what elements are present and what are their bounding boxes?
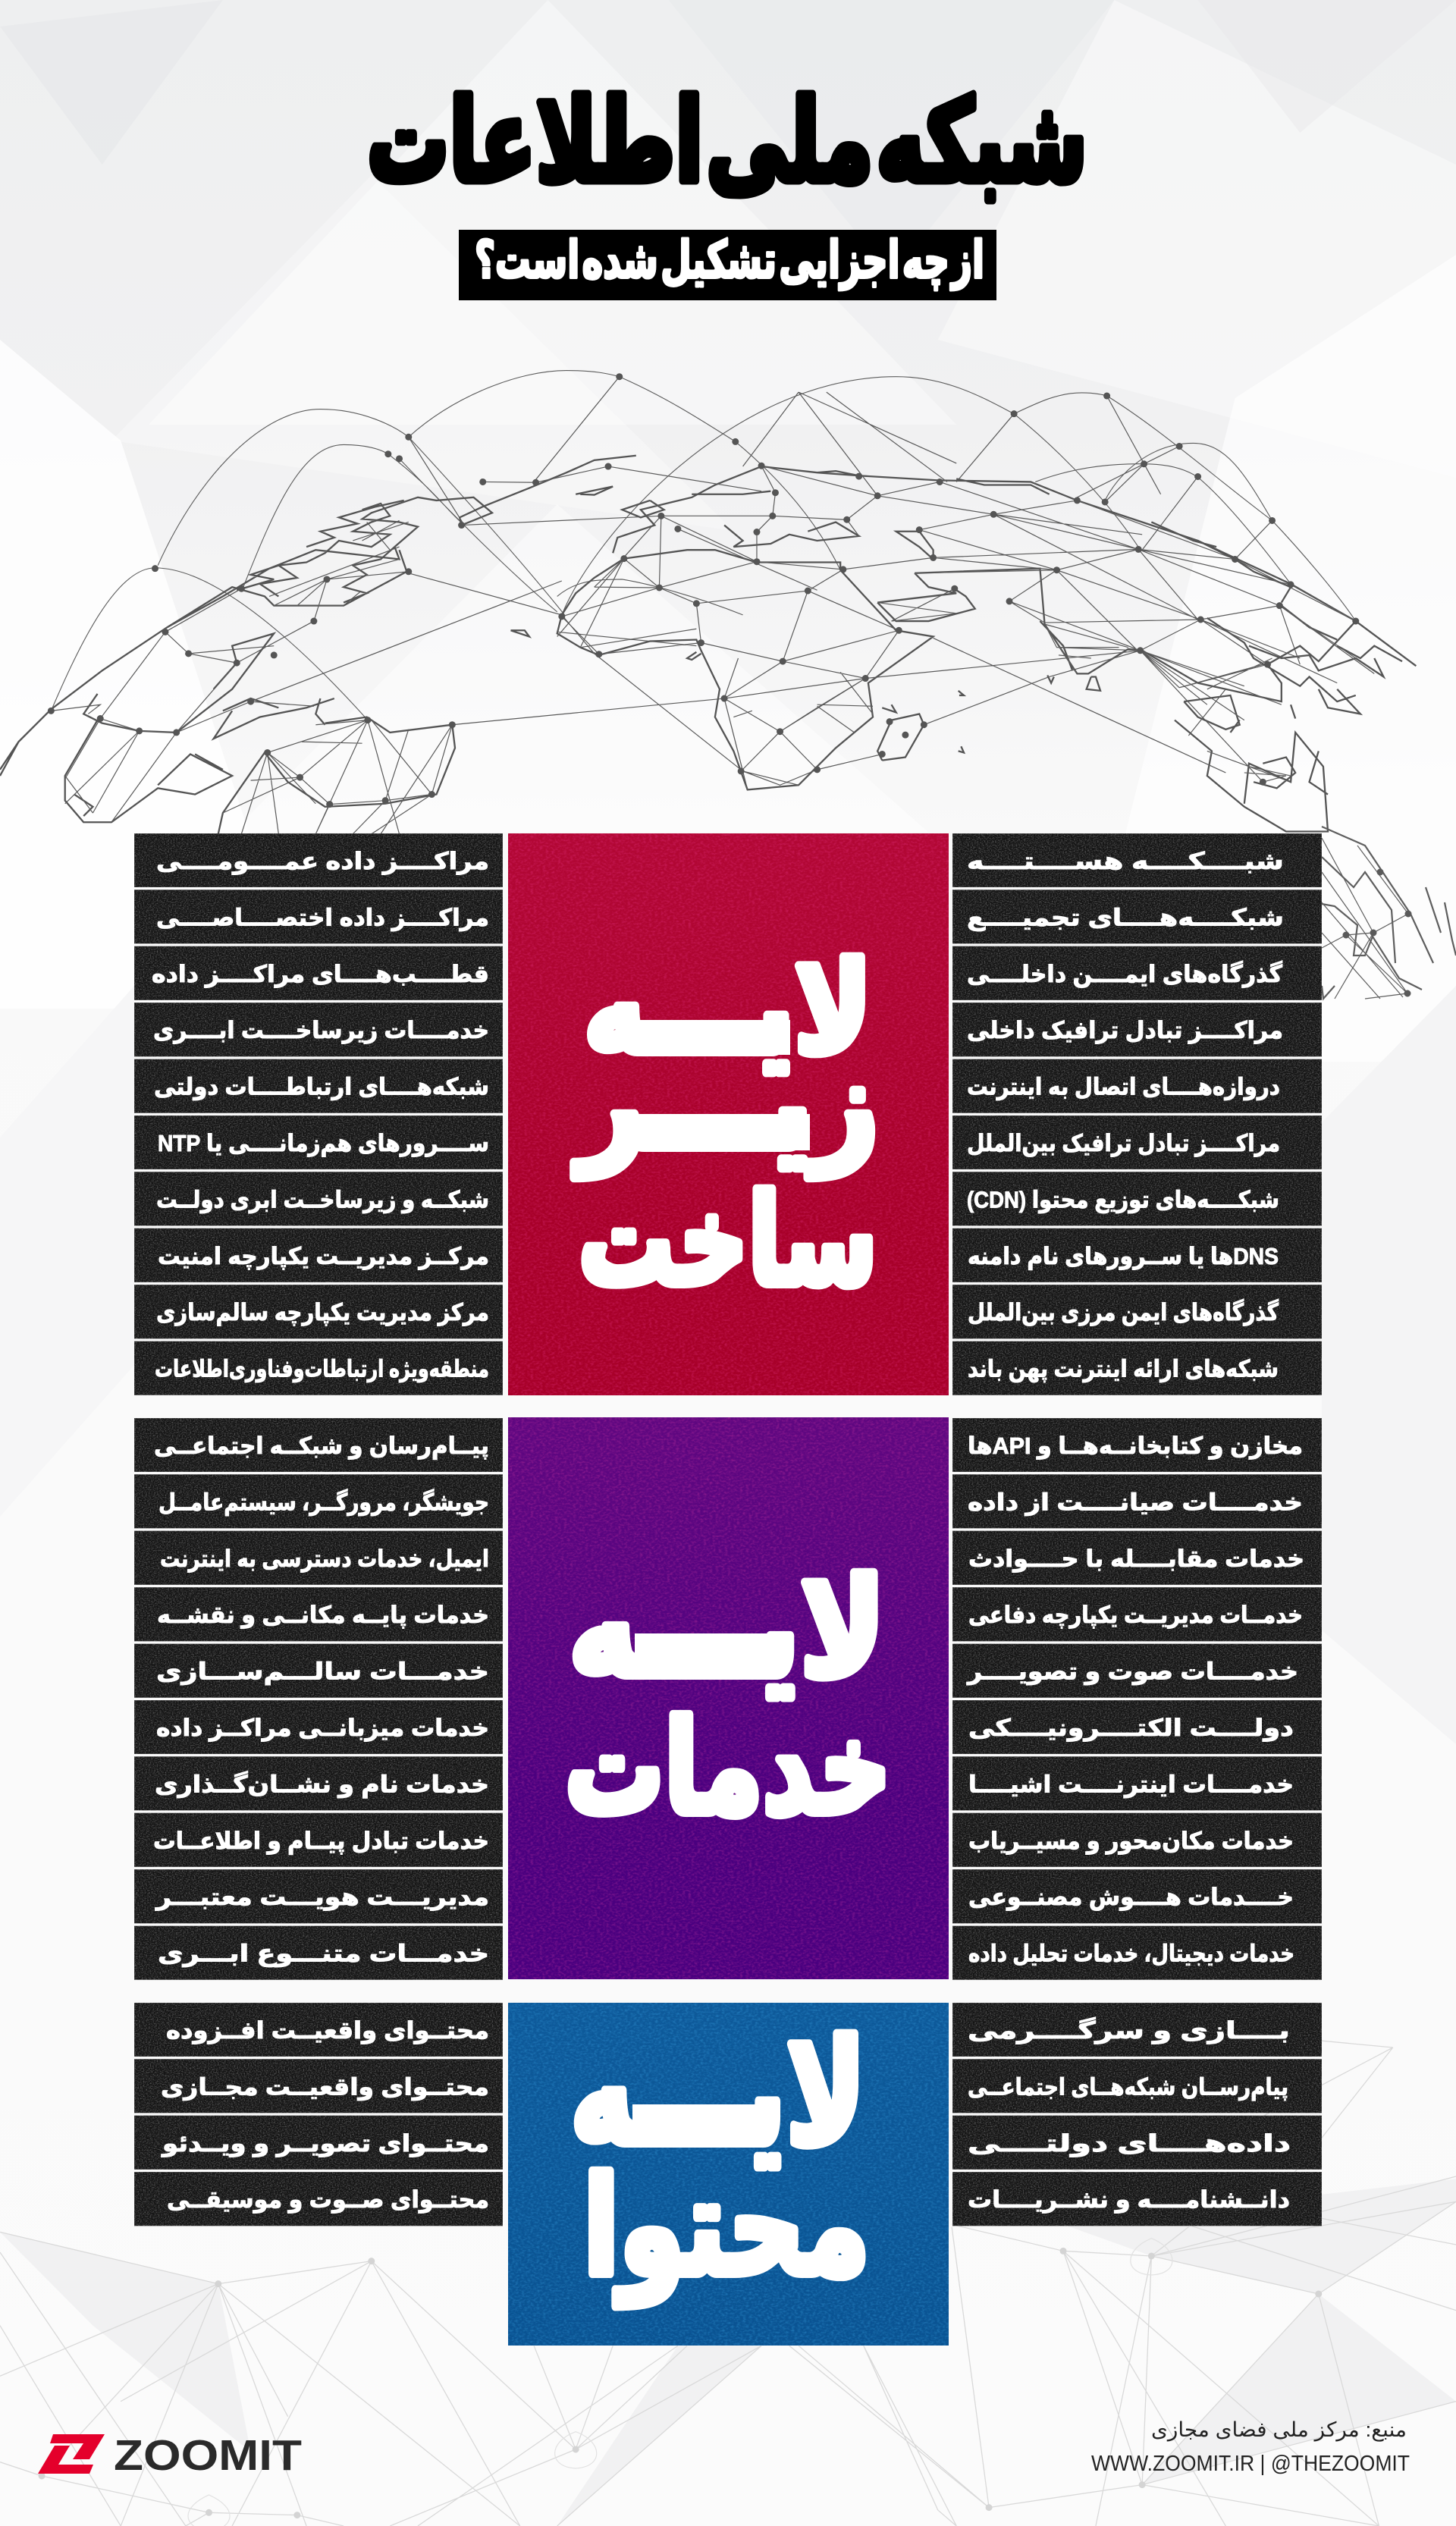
row	[952, 1474, 1322, 1528]
row: مدیریـــت هویـــت معتبـــر	[155, 1884, 489, 1911]
row: دروازه‌هــــای اتصال به اینترنت	[967, 1074, 1280, 1101]
list: infrastructure left	[134, 833, 503, 1395]
heading: structure: ساخت	[579, 1171, 877, 1310]
row	[952, 1228, 1322, 1282]
nodes	[51, 377, 1356, 805]
row	[134, 2116, 503, 2170]
row	[952, 1341, 1322, 1395]
row	[134, 1418, 503, 1472]
row	[134, 1059, 503, 1113]
row: دولــــت الکتــــرونیــــکی	[968, 1715, 1294, 1742]
row: خدمــــات اینترنــــت اشیــــا	[968, 1771, 1294, 1798]
heading: layer: لایـــه	[570, 2013, 866, 2174]
row: خدمات تبادل پیــام و اطلاعــات	[153, 1828, 489, 1855]
heading: under: زیـــر	[574, 1034, 879, 1178]
arcs	[51, 371, 1356, 720]
row	[134, 1756, 503, 1810]
row: مراکــــز تبادل ترافیک بین‌الملل	[967, 1130, 1280, 1157]
row: شبکه‌هــــای ارتباطــــات دولتی	[154, 1074, 489, 1101]
row	[952, 1756, 1322, 1810]
row: مرکــز مدیریــت یکپارچه امنیت	[158, 1243, 489, 1270]
row: خدمات نام و نشــان‌گــذاری	[155, 1770, 489, 1798]
row	[952, 1172, 1322, 1225]
source credit: منبع: مرکز ملی فضای مجازی	[1151, 2418, 1407, 2442]
row	[952, 1700, 1322, 1754]
row	[134, 890, 503, 943]
row: شبــــکــــه هســــتــــه	[967, 848, 1284, 874]
row	[134, 1285, 503, 1338]
row: محتــوای واقعیــت مجــازی	[161, 2073, 489, 2101]
row	[134, 1926, 503, 1980]
row	[134, 1172, 503, 1225]
row	[952, 1059, 1322, 1113]
row: DNSها یا ســرورهای نام دامنه	[968, 1243, 1279, 1270]
panel: infrastructure layer	[508, 833, 949, 1395]
list: infrastructure right	[952, 833, 1322, 1395]
row	[952, 833, 1322, 887]
world network map	[0, 371, 1416, 834]
heading: services: خدمات	[565, 1696, 891, 1840]
list: content left	[134, 2003, 503, 2226]
list: services left	[134, 1418, 503, 1980]
row: شبکــــه‌های توزیع محتوا (CDN)	[967, 1186, 1279, 1213]
row	[952, 2059, 1322, 2113]
row: محتــوای تصویــر و ویــدئو	[161, 2130, 489, 2157]
row: جویشگر، مرورگــر، سیستم‌عامــل	[158, 1488, 489, 1516]
row	[134, 1531, 503, 1585]
row	[952, 2003, 1322, 2057]
row	[952, 1285, 1322, 1338]
list: content right	[952, 2003, 1322, 2226]
source credit	[1091, 2418, 1410, 2476]
subtitle box: از چه اجزایی تشکیل شده است؟	[475, 231, 984, 290]
row: خدمات مکان‌محور و مسیــریاب	[968, 1828, 1294, 1855]
row	[134, 1474, 503, 1528]
row	[134, 1003, 503, 1056]
row	[134, 2003, 503, 2057]
row	[952, 1418, 1322, 1472]
row	[134, 2059, 503, 2113]
row: پیــام‌رسان و شبکــه اجتماعــی	[154, 1432, 489, 1460]
row	[134, 1341, 503, 1395]
row	[952, 1926, 1322, 1980]
row: دانــشنامــــه و نشــریــــات	[968, 2186, 1290, 2214]
row: مراکــــز داده اختصــــاصــــی	[156, 904, 489, 931]
panel: services layer	[508, 1417, 949, 1979]
links	[51, 377, 1374, 834]
row	[952, 2172, 1322, 2226]
row: مراکــــز تبادل ترافیک داخلی	[967, 1017, 1283, 1044]
row	[134, 1116, 503, 1169]
row: گذرگاه‌های ایمــــن داخلــــی	[967, 960, 1283, 988]
row	[134, 1869, 503, 1923]
row: محتــوای صــوت و موسیقــی	[167, 2186, 489, 2214]
source credit: WWW.ZOOMIT.IR | @THEZOOMIT	[1091, 2452, 1410, 2476]
row: خدمات دیجیتال، خدمات تحلیل داده	[968, 1941, 1294, 1967]
row: خدمـــات سالـــم‌ســـازی	[156, 1658, 489, 1686]
row	[952, 1813, 1322, 1867]
row	[134, 1700, 503, 1754]
row: شبکه‌های ارائه اینترنت پهن باند	[968, 1356, 1279, 1383]
network lines background bottom	[0, 2025, 1456, 2526]
row: خدمات میزبانــی مراکــز داده	[156, 1715, 489, 1742]
row	[952, 890, 1322, 943]
row	[134, 1587, 503, 1641]
row: مراکــــز داده عمــــومــــی	[156, 848, 489, 875]
row: ایمیل، خدمات دسترسی به اینترنت	[160, 1545, 489, 1573]
heading: layer: لایـــه	[569, 1553, 886, 1704]
row	[134, 1813, 503, 1867]
row	[952, 2116, 1322, 2170]
row: خدمات پایــه مکانــی و نقشــه	[157, 1602, 489, 1629]
list: services right	[952, 1418, 1322, 1980]
heading: layer: لایـــه	[584, 939, 872, 1078]
logo: zoomit	[38, 2431, 302, 2480]
title: شبکه ملی اطلاعات	[367, 77, 1087, 205]
row	[952, 1116, 1322, 1169]
row: خدمــــات صیانــــت از داده	[968, 1489, 1303, 1516]
row: ســــرورهای هم‌زمانــــی یا NTP	[158, 1130, 489, 1157]
row: مرکز مدیریت یکپارچه سالم‌سازی	[156, 1299, 489, 1326]
continents	[0, 456, 1416, 834]
row	[952, 1531, 1322, 1585]
row: مخازن و کتابخانــه‌هــا و APIها	[968, 1432, 1303, 1460]
row	[952, 946, 1322, 1000]
row	[134, 1228, 503, 1282]
row	[134, 2172, 503, 2226]
icon: z mark	[38, 2434, 105, 2474]
panel: content layer	[508, 2003, 949, 2346]
row: گذرگاه‌های ایمن مرزی بین‌الملل	[968, 1298, 1279, 1326]
row: خدمــــات صوت و تصویــــر	[966, 1658, 1298, 1686]
row	[952, 1644, 1322, 1698]
row	[134, 946, 503, 1000]
row: بــــازی و سرگــــرمی	[968, 2016, 1290, 2044]
row: شبکــه و زیرساخــت ابری دولــت	[156, 1186, 489, 1213]
row	[952, 1003, 1322, 1056]
logo: zoomit: ZOOMIT	[114, 2431, 302, 2480]
row: خدمات مقابــــله با حــــوادث	[968, 1545, 1304, 1573]
row: خدمــــات زیرساخــــت ابــــری	[153, 1017, 489, 1044]
row: منطقه‌ویژه ارتباطات‌وفناوری‌اطلاعات	[155, 1356, 489, 1383]
row: شبکــــه‌هــــای تجمیــــع	[967, 904, 1284, 931]
row	[952, 1869, 1322, 1923]
row: خــــدمات هــــوش مصنــوعی	[968, 1884, 1294, 1911]
row	[134, 1644, 503, 1698]
row: محتــوای واقعیــت افــزوده	[166, 2017, 489, 2044]
row	[952, 1587, 1322, 1641]
heading: content: محتوا	[583, 2151, 870, 2307]
subtitle box	[459, 230, 996, 300]
row: داده‌هــــای دولتــــی	[968, 2130, 1291, 2157]
row: خدمــات مدیریــت یکپارچه دفاعی	[968, 1602, 1303, 1629]
row	[134, 833, 503, 887]
row: خدمـــات متنـــوع ابـــری	[158, 1941, 489, 1968]
row: پیام‌رســان شبکه‌هــای اجتماعــی	[968, 2073, 1288, 2101]
row: قطــــب‌هــــای مراکــــز داده	[152, 961, 489, 988]
map fragment: far east beyond the rows	[1322, 827, 1456, 999]
